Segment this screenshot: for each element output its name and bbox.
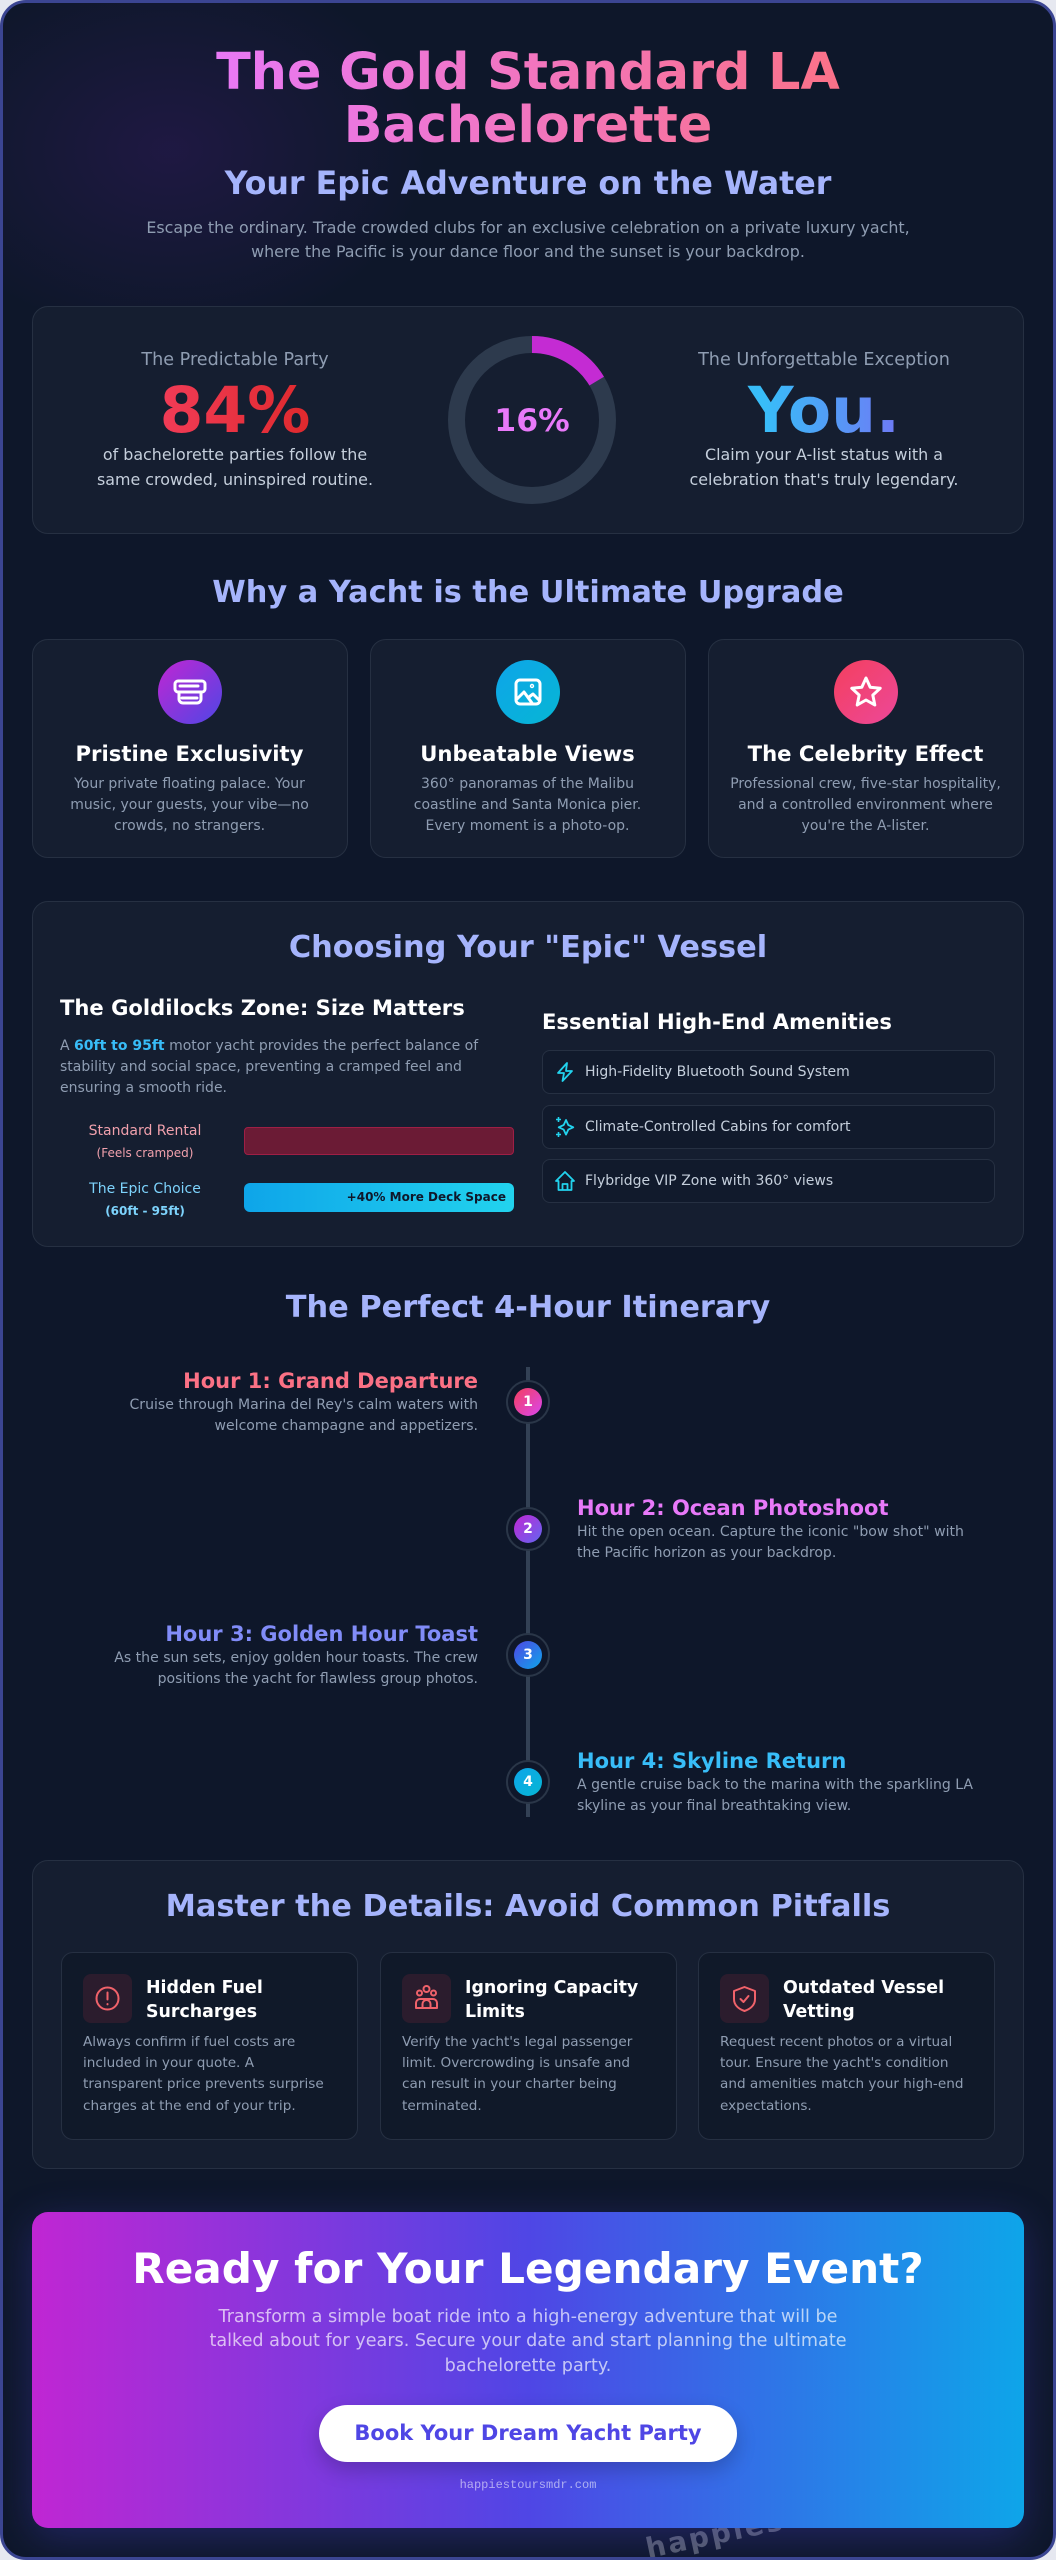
card text	[70, 776, 309, 834]
pitfall text: and amenities match your high-end	[720, 2076, 963, 2092]
label: standard rental: Standard Rental	[89, 1123, 201, 1139]
cta url: happiestoursmdr.com	[460, 2478, 596, 2492]
cta button	[319, 2405, 737, 2462]
amenity: sound system	[542, 1050, 995, 1094]
hour 4 description	[577, 1777, 973, 1814]
title	[198, 44, 858, 152]
donut chart: 16%: 16%	[494, 402, 569, 438]
hour 2 text	[577, 1496, 964, 1561]
panel: celebrity effect	[708, 639, 1024, 858]
hour 1 description: Cruise through Marina del Rey's calm waters with	[130, 1397, 478, 1413]
label: epic choice: The Epic Choice	[89, 1180, 201, 1196]
pitfall title: Hidden Fuel	[146, 1978, 263, 1998]
number 1: 1	[523, 1394, 533, 1410]
icon: sparkle	[556, 1117, 574, 1137]
pitfall text: transparent price prevents surprise	[83, 2076, 324, 2092]
panel: unbeatable views	[370, 639, 686, 858]
icon: star	[834, 660, 898, 724]
hour 3 description	[114, 1650, 478, 1687]
pitfall title	[783, 1978, 944, 2022]
cta text: talked about for years. Secure your date and start planning the ultimate	[209, 2331, 847, 2351]
pitfall title: Vetting	[783, 2002, 855, 2022]
stat: 84%	[135, 371, 335, 451]
hour 2 description: Hit the open ocean. Capture the iconic "bow shot" with	[577, 1524, 964, 1540]
card text: Every moment is a photo-op.	[425, 818, 630, 834]
cta text: Transform a simple boat ride into a high-energy adventure that will be	[219, 2306, 837, 2326]
hour 3 description: As the sun sets, enjoy golden hour toasts. The crew	[114, 1650, 478, 1666]
timeline node 4	[506, 1760, 550, 1804]
pitfall text: Request recent photos or a virtual	[720, 2034, 952, 2050]
icon: exclusivity	[158, 660, 222, 724]
panel: call to action	[32, 2212, 1024, 2528]
pitfall text: can result in your charter being	[402, 2076, 617, 2092]
stat description: A-list: Claim your A-list status with a	[705, 445, 943, 464]
card title: Pristine Exclusivity	[75, 741, 304, 766]
amenity text: Climate-Controlled Cabins for comfort	[585, 1119, 850, 1135]
label: standard rental: (Feels cramped)	[97, 1146, 193, 1160]
text: goldilocks description: A 60ft to 95ft motor yacht provides the perfect balance of	[60, 1038, 478, 1054]
pitfall text	[402, 2034, 632, 2114]
hour 1 text	[130, 1369, 478, 1434]
timeline node 2	[506, 1507, 550, 1551]
card text: Your private floating palace. Your	[74, 776, 305, 792]
donut chart: 16%	[448, 336, 616, 504]
pitfall card: fuel	[61, 1952, 358, 2140]
number 3: 3	[523, 1647, 533, 1663]
icon: shield	[720, 1974, 769, 2023]
card text: music, your guests, your vibe—no	[70, 797, 309, 813]
hour 1 description	[130, 1397, 478, 1434]
pitfall text: terminated.	[402, 2098, 482, 2114]
cta title: Ready for Your Legendary Event?	[132, 2244, 924, 2292]
panel: pitfalls	[32, 1860, 1024, 2169]
title: The Gold Standard LA	[216, 42, 840, 100]
number 2: 2	[523, 1521, 533, 1537]
card text	[730, 776, 1001, 834]
stat description: A-list	[690, 445, 958, 488]
pitfall title: Outdated Vessel	[783, 1978, 944, 1998]
pitfall title: Surcharges	[146, 2002, 257, 2022]
card title: Unbeatable Views	[420, 741, 635, 766]
panel: statistics	[32, 306, 1024, 534]
hour 3 description: positions the yacht for flawless group photos.	[158, 1671, 478, 1687]
icon: bolt	[557, 1062, 573, 1082]
title: Bachelorette	[344, 95, 712, 154]
label: epic choice	[89, 1180, 201, 1218]
hour 3 title: Hour 3: Golden Hour Toast	[165, 1622, 478, 1646]
pitfall text	[720, 2034, 963, 2114]
bar: standard rental	[244, 1127, 514, 1155]
stat: You.	[724, 371, 924, 451]
timeline node 3	[506, 1633, 550, 1677]
heading: choosing vessel: Choosing Your "Epic" Vessel	[289, 930, 767, 965]
number 3	[514, 1641, 542, 1669]
card text: and a controlled environment where	[738, 797, 993, 813]
stat: 84%: 84%	[160, 374, 310, 447]
card text	[414, 776, 641, 834]
pitfall text: expectations.	[720, 2098, 812, 2114]
hour 1 description: welcome champagne and appetizers.	[215, 1418, 478, 1434]
stat label: unforgettable exception: The Unforgettable Exception	[698, 350, 950, 370]
stat description: A-list: celebration that's truly legendary.	[690, 470, 958, 488]
pitfall text: Verify the yacht's legal passenger	[402, 2034, 632, 2050]
pitfall card: vetting	[698, 1952, 995, 2140]
number 2	[514, 1515, 542, 1543]
pitfall title	[465, 1978, 638, 2022]
bar: epic choice: +40% More Deck Space	[347, 1190, 506, 1204]
subtitle: Your Epic Adventure on the Water	[225, 166, 831, 202]
timeline node 1	[506, 1380, 550, 1424]
intro paragraph: where the Pacific is your dance floor and the sunset is your backdrop.	[251, 242, 805, 261]
number 4	[514, 1768, 542, 1796]
pitfall text	[83, 2034, 324, 2114]
pitfall text: included in your quote. A	[83, 2055, 254, 2071]
number 1	[514, 1388, 542, 1416]
panel: pristine exclusivity	[32, 639, 348, 858]
amenity text: Flybridge VIP Zone with 360° views	[585, 1173, 833, 1189]
icon: alert	[83, 1974, 132, 2023]
pitfall text: Always confirm if fuel costs are	[83, 2034, 295, 2050]
heading: goldilocks zone: The Goldilocks Zone: Size Matters	[60, 994, 465, 1020]
amenity: climate	[542, 1105, 995, 1149]
hour 4 description: A gentle cruise back to the marina with the sparkling LA	[577, 1777, 973, 1793]
icon: views	[496, 660, 560, 724]
hour 1 title: Hour 1: Grand Departure	[183, 1369, 478, 1393]
icon: home	[555, 1171, 575, 1191]
card title: The Celebrity Effect	[748, 741, 983, 766]
pitfall title: Ignoring Capacity	[465, 1978, 638, 1998]
stat: You.: You.	[748, 374, 900, 447]
intro paragraph: Escape the ordinary. Trade crowded clubs for an exclusive celebration on a private luxury yacht,	[146, 218, 910, 236]
stat description: routine: of bachelorette parties follow the	[103, 445, 367, 464]
hour 2 description	[577, 1524, 964, 1561]
intro paragraph	[146, 218, 910, 261]
bar: epic choice	[244, 1183, 514, 1212]
card text: Professional crew, five-star hospitality,	[730, 776, 1001, 792]
pitfall title: Limits	[465, 2002, 525, 2022]
card text: you're the A-lister.	[802, 818, 929, 834]
card text: coastline and Santa Monica pier.	[414, 797, 641, 813]
stat description: routine: same crowded, uninspired routine.	[97, 470, 373, 488]
icon: people	[402, 1974, 451, 2023]
pitfall card: capacity	[380, 1952, 677, 2140]
amenity text: High-Fidelity Bluetooth Sound System	[585, 1064, 850, 1080]
heading: amenities: Essential High-End Amenities	[542, 1009, 892, 1034]
label: epic choice: (60ft - 95ft)	[105, 1204, 185, 1218]
hour 4 title: Hour 4: Skyline Return	[577, 1749, 846, 1773]
cta text: bachelorette party.	[445, 2356, 611, 2376]
stat label: predictable party: The Predictable Party	[141, 350, 329, 370]
timeline line	[526, 1367, 530, 1817]
pitfall text: limit. Overcrowding is unsafe and	[402, 2055, 630, 2071]
hour 4 description: skyline as your final breathtaking view.	[577, 1798, 851, 1814]
pitfall text: tour. Ensure the yacht's condition	[720, 2055, 949, 2071]
heading: itinerary: The Perfect 4-Hour Itinerary	[286, 1290, 770, 1325]
hour 3 text	[114, 1622, 478, 1687]
stat description: routine	[97, 445, 373, 488]
cta text	[209, 2306, 847, 2376]
background glow	[0, 0, 560, 340]
pitfall title	[146, 1978, 263, 2022]
panel: choosing vessel	[32, 901, 1024, 1247]
text: goldilocks description	[60, 1038, 478, 1096]
label: standard rental	[89, 1123, 201, 1160]
hour 4 text	[577, 1749, 973, 1814]
heading: pitfalls: Master the Details: Avoid Common Pitfalls	[166, 1889, 890, 1924]
hour 2 description: the Pacific horizon as your backdrop.	[577, 1545, 836, 1561]
hour 2 title: Hour 2: Ocean Photoshoot	[577, 1496, 888, 1520]
amenity: flybridge	[542, 1159, 995, 1203]
pitfall text: charges at the end of your trip.	[83, 2098, 296, 2114]
card text: 360° panoramas of the Malibu	[421, 776, 634, 792]
number 4: 4	[523, 1774, 533, 1790]
heading: why a yacht: Why a Yacht is the Ultimate Upgrade	[212, 575, 844, 610]
card text: crowds, no strangers.	[114, 818, 265, 834]
text: goldilocks description: ensuring a smooth ride.	[60, 1080, 227, 1096]
cta button: Book Your Dream Yacht Party	[354, 2421, 702, 2445]
text: goldilocks description: stability and social space, preventing a cramped feel and	[60, 1059, 462, 1075]
